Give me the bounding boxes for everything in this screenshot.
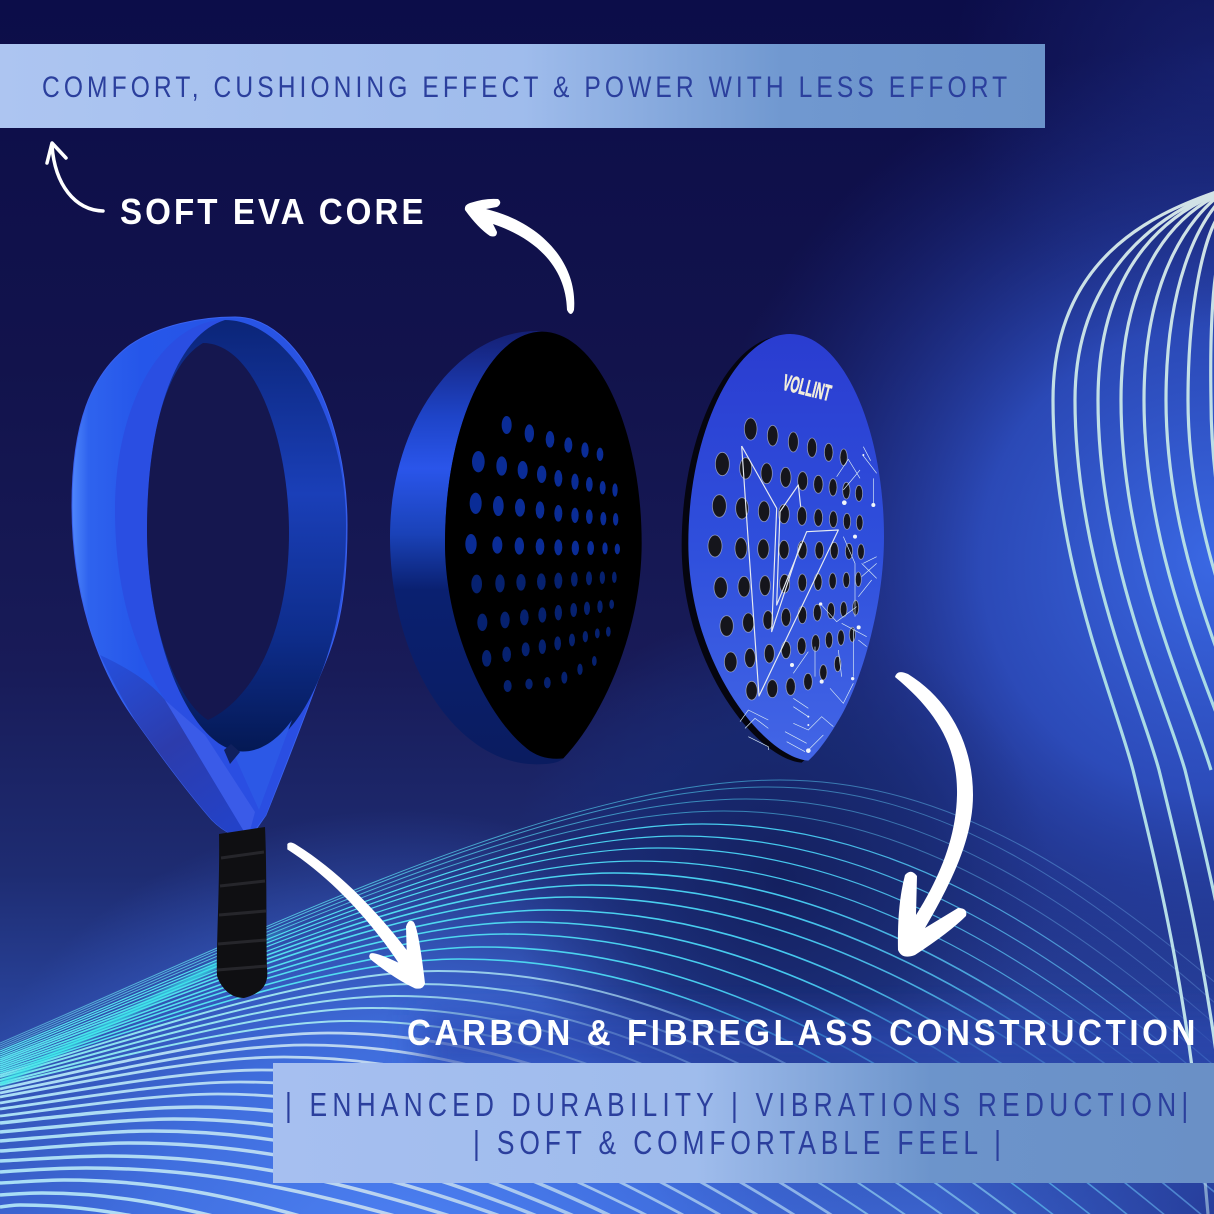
face blue surface	[688, 334, 884, 761]
wave line pattern: bottom	[0, 780, 1214, 1214]
fade behind construction heading	[420, 1015, 1214, 1075]
face holes	[708, 418, 864, 700]
grip	[217, 827, 267, 998]
wave line pattern: right side	[1053, 192, 1214, 1214]
frame outer body	[72, 317, 347, 838]
heading: soft eva core: SOFT EVA CORE	[120, 193, 424, 232]
core side wall	[390, 331, 563, 764]
throat opening	[224, 744, 240, 764]
frame inner wall	[147, 320, 346, 752]
top banner	[0, 44, 1045, 128]
heading: carbon and fibreglass construction: CARBON & FIBREGLASS CONSTRUCTION	[407, 1014, 1195, 1053]
frame opening	[147, 343, 289, 720]
circuit nodes	[790, 454, 875, 753]
V logo line art	[742, 446, 838, 696]
arrow: core to heading	[465, 199, 574, 314]
arrow: small, to banner	[47, 143, 103, 211]
arrow: frame to construction	[287, 843, 425, 989]
banner text: COMFORT, CUSHIONING EFFECT & POWER WITH LESS EFFORT	[42, 70, 1007, 104]
core holes	[465, 416, 620, 555]
racket frame	[72, 317, 347, 998]
carbon fibreglass face	[682, 334, 884, 763]
benefits text line 1: | ENHANCED DURABILITY | VIBRATIONS REDUCTION|	[285, 1087, 1188, 1124]
throat left arm highlight	[165, 700, 255, 838]
arrow: face to construction	[895, 672, 973, 957]
circuit traces	[740, 447, 877, 752]
EVA core	[390, 331, 642, 764]
benefits text line 2: | SOFT & COMFORTABLE FEEL |	[473, 1125, 1001, 1162]
brand logo: VOLLINT	[780, 369, 834, 406]
face black backing	[682, 336, 877, 763]
frame shaded lower side	[100, 655, 248, 838]
core black face	[445, 332, 642, 759]
core holes, lower rows	[471, 571, 617, 692]
benefits panel	[273, 1063, 1214, 1183]
throat recess	[232, 720, 292, 810]
frame front rim	[115, 320, 318, 838]
